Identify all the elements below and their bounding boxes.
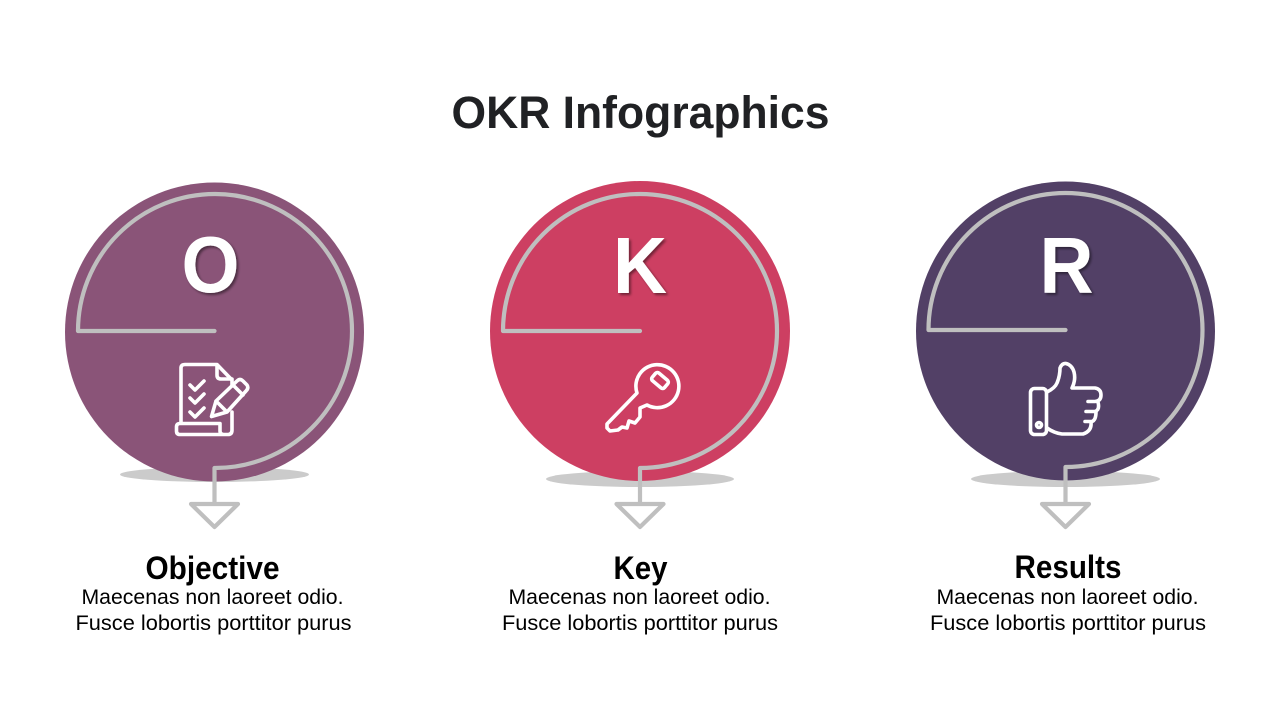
description <box>930 586 1206 635</box>
description: Maecenas non laoreet odio. <box>936 586 1198 609</box>
heading: Results <box>1014 549 1122 585</box>
icon: checklist and pencil <box>176 364 248 434</box>
panel: results <box>916 182 1215 635</box>
icon: thumbs up <box>1030 363 1101 434</box>
circle shadow <box>971 471 1160 487</box>
heading: Objective <box>146 550 280 586</box>
letter K: K <box>613 221 667 310</box>
description <box>76 586 352 635</box>
circle shadow <box>120 467 309 482</box>
circle <box>916 182 1215 480</box>
description: Fusce lobortis porttitor purus <box>502 612 778 635</box>
panel: objective <box>65 182 364 635</box>
ring arrow <box>78 194 352 527</box>
circle <box>65 182 364 482</box>
icon: key <box>607 365 679 431</box>
letter R: R <box>1040 221 1094 310</box>
heading: Key <box>614 550 668 586</box>
panel: key <box>490 181 790 635</box>
description: Maecenas non laoreet odio. <box>508 586 770 609</box>
description: Fusce lobortis porttitor purus <box>930 612 1206 635</box>
title: OKR Infographics <box>452 87 830 138</box>
circle <box>490 181 790 481</box>
ring arrow <box>503 194 777 527</box>
circle shadow <box>546 471 734 487</box>
ring arrow <box>928 193 1202 527</box>
letter O: O <box>182 220 240 309</box>
description: Maecenas non laoreet odio. <box>82 586 344 609</box>
description: Fusce lobortis porttitor purus <box>76 612 352 635</box>
description <box>502 586 778 635</box>
